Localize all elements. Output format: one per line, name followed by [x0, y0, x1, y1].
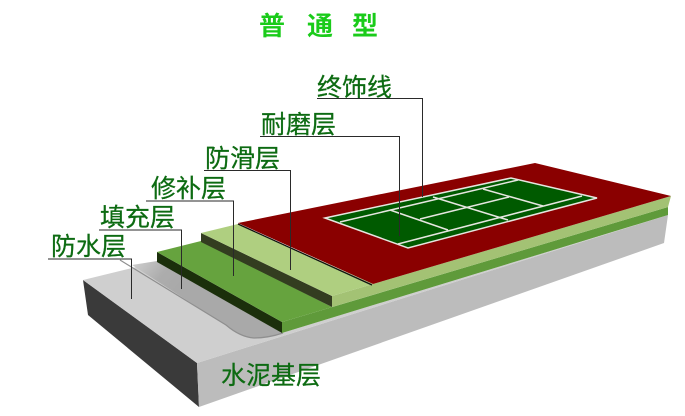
- label: 水泥基层: 水泥基层: [221, 362, 321, 390]
- label: 防水层: 防水层: [51, 233, 126, 261]
- title: 普: [259, 11, 285, 41]
- label: 填充层: 填充层: [100, 204, 175, 232]
- label: 防水层: [48, 233, 132, 299]
- title: [259, 11, 378, 41]
- label: 填充层: [99, 204, 182, 289]
- waterproof layer: [120, 260, 283, 338]
- label: 耐磨层: [260, 111, 400, 236]
- tennis court with lines: [325, 178, 597, 248]
- label: 修补层: 修补层: [151, 175, 226, 203]
- label: 防滑层: 防滑层: [205, 145, 280, 173]
- label: 耐磨层: 耐磨层: [261, 111, 336, 139]
- title: 型: [352, 11, 378, 41]
- label: 修补层: [146, 175, 234, 276]
- label: 终饰线: 终饰线: [317, 74, 392, 102]
- repair layer (dark green): [157, 207, 668, 333]
- title: 通: [307, 11, 333, 41]
- anti-slip layer (light green): [201, 196, 671, 307]
- wear layer (red surface): [238, 163, 671, 285]
- label: 终饰线: [317, 74, 422, 197]
- label: 防滑层: [204, 145, 290, 270]
- concrete base layer: [83, 215, 668, 407]
